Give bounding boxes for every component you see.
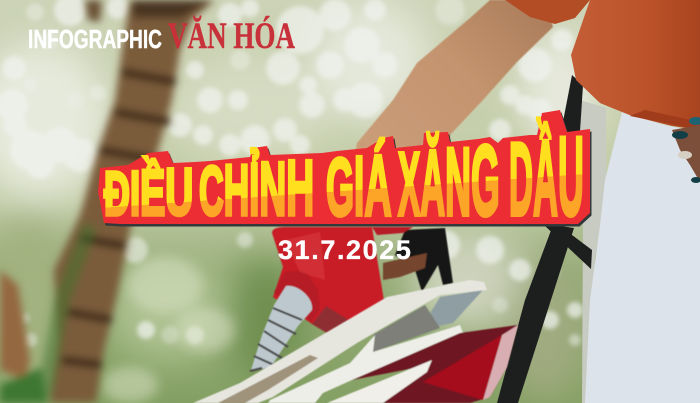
- woman: right hand with painted nails: [672, 117, 700, 183]
- label: INFOGRAPHIC: INFOGRAPHIC: [28, 24, 162, 54]
- woman: white skirt: [585, 112, 700, 403]
- tail light: [352, 325, 518, 403]
- trigger handle: [395, 228, 453, 292]
- title backing shadow: [100, 112, 592, 226]
- black stroller frame: [497, 75, 592, 403]
- date: 31.7.2025: 31.7.2025: [278, 235, 413, 265]
- lower fairing: [327, 360, 432, 403]
- title: Điều chỉnh giá xăng dầu: [98, 110, 592, 239]
- fuel pump nozzle: [250, 227, 453, 371]
- label: VĂN HÓA: VĂN HÓA: [168, 15, 295, 57]
- upper fairing: [268, 325, 463, 403]
- hose: [251, 286, 312, 370]
- woman: arm: [350, 0, 553, 205]
- word: XĂNG: XĂNG: [398, 125, 500, 236]
- word: ĐIỀU: ĐIỀU: [104, 154, 193, 230]
- nozzle body: [272, 227, 385, 336]
- motorcycle body: [193, 280, 518, 403]
- tree trunk: [0, 0, 215, 403]
- woman: gray pole: [580, 100, 606, 403]
- word: CHỈNH: CHỈNH: [199, 145, 314, 233]
- woman: orange sweater: [505, 0, 700, 130]
- word: GIÁ: GIÁ: [326, 137, 392, 234]
- word: DẦU: DẦU: [509, 114, 584, 239]
- title backing red: [98, 110, 590, 224]
- logo: Infographic Văn Hóa: [28, 15, 295, 57]
- soft pale foliage: [102, 257, 235, 403]
- bokeh highlights: [0, 0, 583, 347]
- hand on trigger: [383, 253, 427, 280]
